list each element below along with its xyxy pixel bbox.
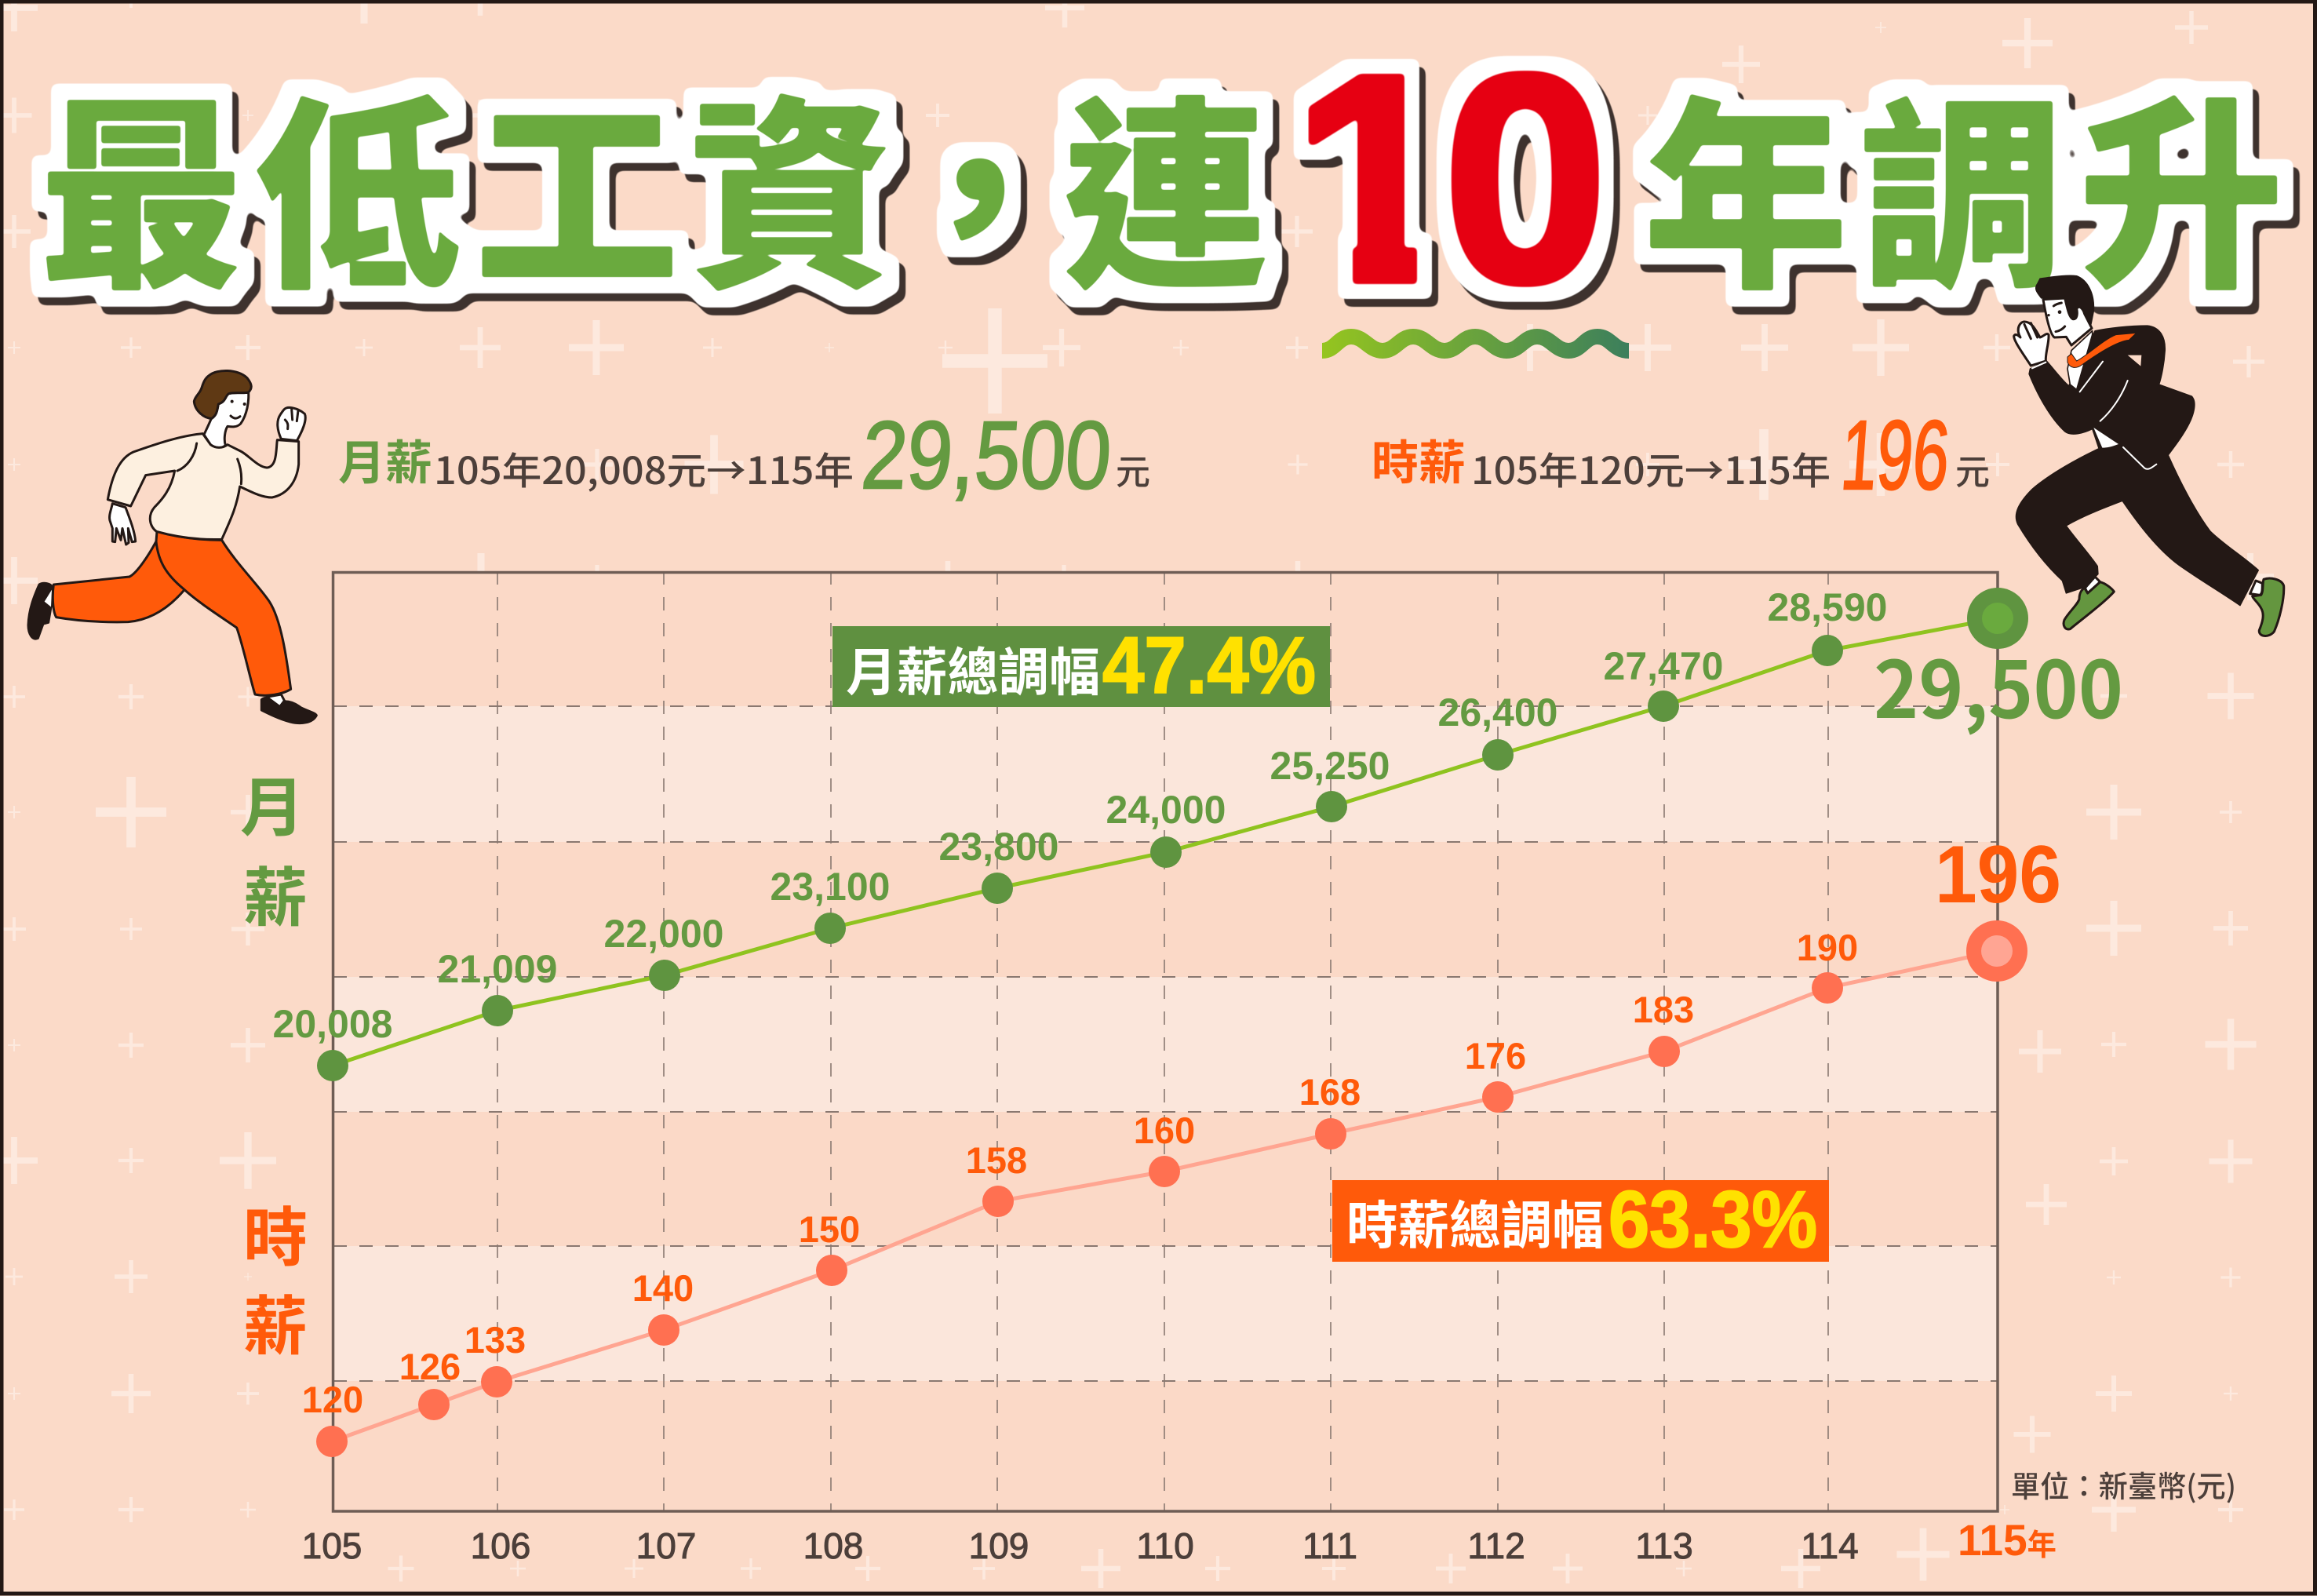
chart: minimum wage line chart (273, 571, 2236, 1566)
side label: hourly: 時 (243, 1186, 308, 1279)
hourly wage value labels: 158 (966, 1139, 1027, 1181)
monthly final value 29,500: 29,500 (1874, 627, 2123, 741)
hourly wage points (316, 920, 2027, 1457)
side label: monthly (240, 756, 308, 939)
monthly wage value labels: 27,470 (1604, 644, 1723, 688)
monthly wage value labels: 22,000 (604, 912, 723, 956)
subheader: hourly wage: 元 (1955, 444, 1990, 494)
hourly wage value labels: 168 (1299, 1071, 1361, 1113)
callout: hourly total increase: 時薪總調幅 (1346, 1184, 1604, 1259)
title: 年調升 (1643, 33, 2284, 330)
callout: monthly total increase: 47.4% (1102, 621, 1316, 710)
title: 0 (1443, 13, 1608, 344)
x axis year labels: 114 (1801, 1525, 1859, 1566)
wavy underline (1322, 337, 1629, 351)
subheader: hourly wage: 時薪 (1372, 425, 1466, 494)
callout: monthly total increase (832, 621, 1330, 710)
hourly wage value labels: 176 (1465, 1035, 1526, 1077)
monthly wage value labels: 21,009 (438, 947, 557, 991)
monthly wage value labels: 23,800 (939, 825, 1058, 869)
subheader: monthly wage: 29,500 (858, 401, 1115, 508)
x axis year labels: 106 (471, 1525, 530, 1566)
x axis year labels: 105 (302, 1525, 362, 1566)
side label: hourly: 薪 (243, 1274, 308, 1368)
x axis final year: 115年 (1958, 1515, 2057, 1565)
hourly wage value labels: 190 (1797, 927, 1858, 968)
monthly wage value labels: 25,250 (1270, 744, 1390, 788)
side label: monthly: 月 (240, 756, 304, 849)
callout: hourly total increase: 63.3% (1608, 1175, 1817, 1264)
hourly wage value labels: 150 (799, 1208, 860, 1250)
side label: monthly: 薪 (243, 846, 308, 939)
x axis year labels: 110 (1136, 1525, 1194, 1566)
monthly wage points (317, 588, 2028, 1081)
hourly wage value labels (302, 927, 1858, 1420)
callout: hourly total increase (1332, 1175, 1829, 1264)
x axis year labels: 109 (969, 1525, 1029, 1566)
hourly wage value labels: 183 (1633, 989, 1694, 1030)
hourly wage value labels: 120 (302, 1379, 363, 1420)
x axis year labels: 111 (1302, 1525, 1357, 1566)
side label: hourly (243, 1186, 308, 1368)
x axis year labels: 113 (1635, 1525, 1693, 1566)
subheader: monthly wage: 元 (1116, 444, 1150, 494)
title (38, 13, 2284, 344)
subheader: monthly wage: 月薪 (338, 425, 432, 494)
monthly wage value labels: 24,000 (1106, 788, 1226, 832)
hourly final value 196: 196 (1935, 829, 2061, 920)
monthly wage value labels: 23,100 (771, 865, 890, 909)
title: 最低工資，連 (38, 33, 1268, 330)
illustration: running woman (28, 370, 316, 723)
illustration: running man in suit (2014, 275, 2284, 636)
monthly wage line (333, 618, 1998, 1066)
subheader: monthly wage: 105年20,008元→115年 (434, 440, 854, 495)
subheader: hourly wage (1372, 400, 1990, 510)
chart plot background bands (333, 571, 1998, 1512)
subheader: hourly wage: 196 (1838, 400, 1953, 510)
monthly wage value labels (273, 585, 1887, 1046)
callout: monthly total increase: 月薪總調幅 (846, 631, 1100, 706)
x axis year labels: 108 (803, 1525, 863, 1566)
hourly wage line (332, 951, 1997, 1441)
hourly wage value labels: 133 (464, 1319, 526, 1361)
hourly wage value labels: 126 (399, 1346, 461, 1387)
x axis year labels: 107 (636, 1525, 696, 1566)
monthly wage value labels: 28,590 (1768, 585, 1887, 629)
monthly wage value labels: 20,008 (273, 1002, 392, 1046)
x axis year labels (302, 1525, 1859, 1566)
unit note: 單位：新臺幣(元) (2011, 1463, 2236, 1506)
monthly wage value labels: 26,400 (1438, 691, 1557, 734)
hourly wage value labels: 140 (632, 1267, 694, 1309)
x axis year labels: 112 (1467, 1525, 1525, 1566)
subheader: monthly wage (338, 401, 1150, 508)
subheader: hourly wage: 105年120元→115年 (1471, 440, 1831, 495)
title: 1 (1291, 13, 1456, 344)
hourly wage value labels: 160 (1134, 1110, 1195, 1151)
